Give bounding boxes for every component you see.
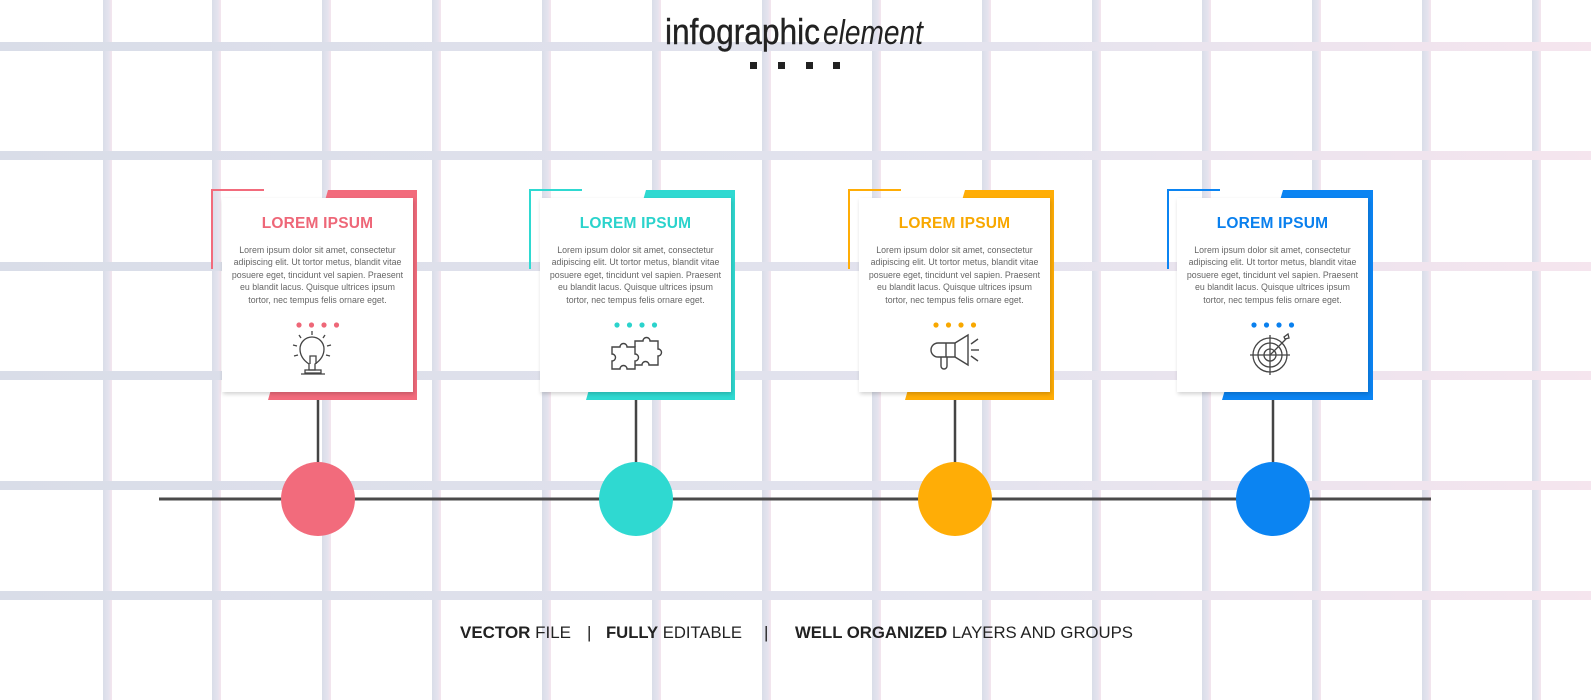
card 3: adipiscing elit. Ut tortor metus, blandit vitae (871, 257, 1038, 267)
card 3: tortor, nec tempus felis ornare eget. (885, 295, 1024, 305)
dots and icon: light bulb (292, 322, 340, 375)
card 4: LOREM IPSUM (1217, 215, 1328, 232)
card 1: tortor, nec tempus felis ornare eget. (248, 295, 387, 305)
card 2 (540, 198, 731, 392)
card 1 (222, 198, 413, 392)
card 1: adipiscing elit. Ut tortor metus, blandit vitae (234, 257, 401, 267)
card 2: posuere eget, tincidunt vel sapien. Praesent (550, 270, 721, 280)
card 2: tortor, nec tempus felis ornare eget. (566, 295, 705, 305)
card 3: eu blandit lacus. Quisque ultrices ipsum (877, 282, 1032, 292)
dots and icon: megaphone (930, 322, 979, 370)
card 2: adipiscing elit. Ut tortor metus, blandit vitae (552, 257, 719, 267)
title: infographic (665, 11, 820, 52)
card 2: LOREM IPSUM (580, 215, 691, 232)
footer text: | (764, 623, 768, 642)
dots and icon: puzzle (611, 322, 662, 370)
card 1: eu blandit lacus. Quisque ultrices ipsum (240, 282, 395, 292)
card 4: Lorem ipsum dolor sit amet, consectetur (1194, 245, 1351, 255)
card 4: tortor, nec tempus felis ornare eget. (1203, 295, 1342, 305)
title: element (823, 14, 924, 52)
footer text: FULLY EDITABLE (606, 623, 742, 642)
card 4: adipiscing elit. Ut tortor metus, blandit vitae (1189, 257, 1356, 267)
card 3: LOREM IPSUM (899, 215, 1010, 232)
card 3 (859, 198, 1050, 392)
card 4: posuere eget, tincidunt vel sapien. Praesent (1187, 270, 1358, 280)
dots and icon: target (1250, 322, 1294, 375)
card 1: posuere eget, tincidunt vel sapien. Praesent (232, 270, 403, 280)
card 4: eu blandit lacus. Quisque ultrices ipsum (1195, 282, 1350, 292)
footer text: WELL ORGANIZED LAYERS AND GROUPS (795, 623, 1133, 642)
footer text: | (587, 623, 591, 642)
card 1: LOREM IPSUM (262, 215, 373, 232)
card 3: posuere eget, tincidunt vel sapien. Praesent (869, 270, 1040, 280)
card 4 (1177, 198, 1368, 392)
card 1: Lorem ipsum dolor sit amet, consectetur (239, 245, 396, 255)
title (665, 11, 924, 69)
card 2: Lorem ipsum dolor sit amet, consectetur (557, 245, 714, 255)
footer text: VECTOR FILE (460, 623, 571, 642)
card 2: eu blandit lacus. Quisque ultrices ipsum (558, 282, 713, 292)
card 3: Lorem ipsum dolor sit amet, consectetur (876, 245, 1033, 255)
